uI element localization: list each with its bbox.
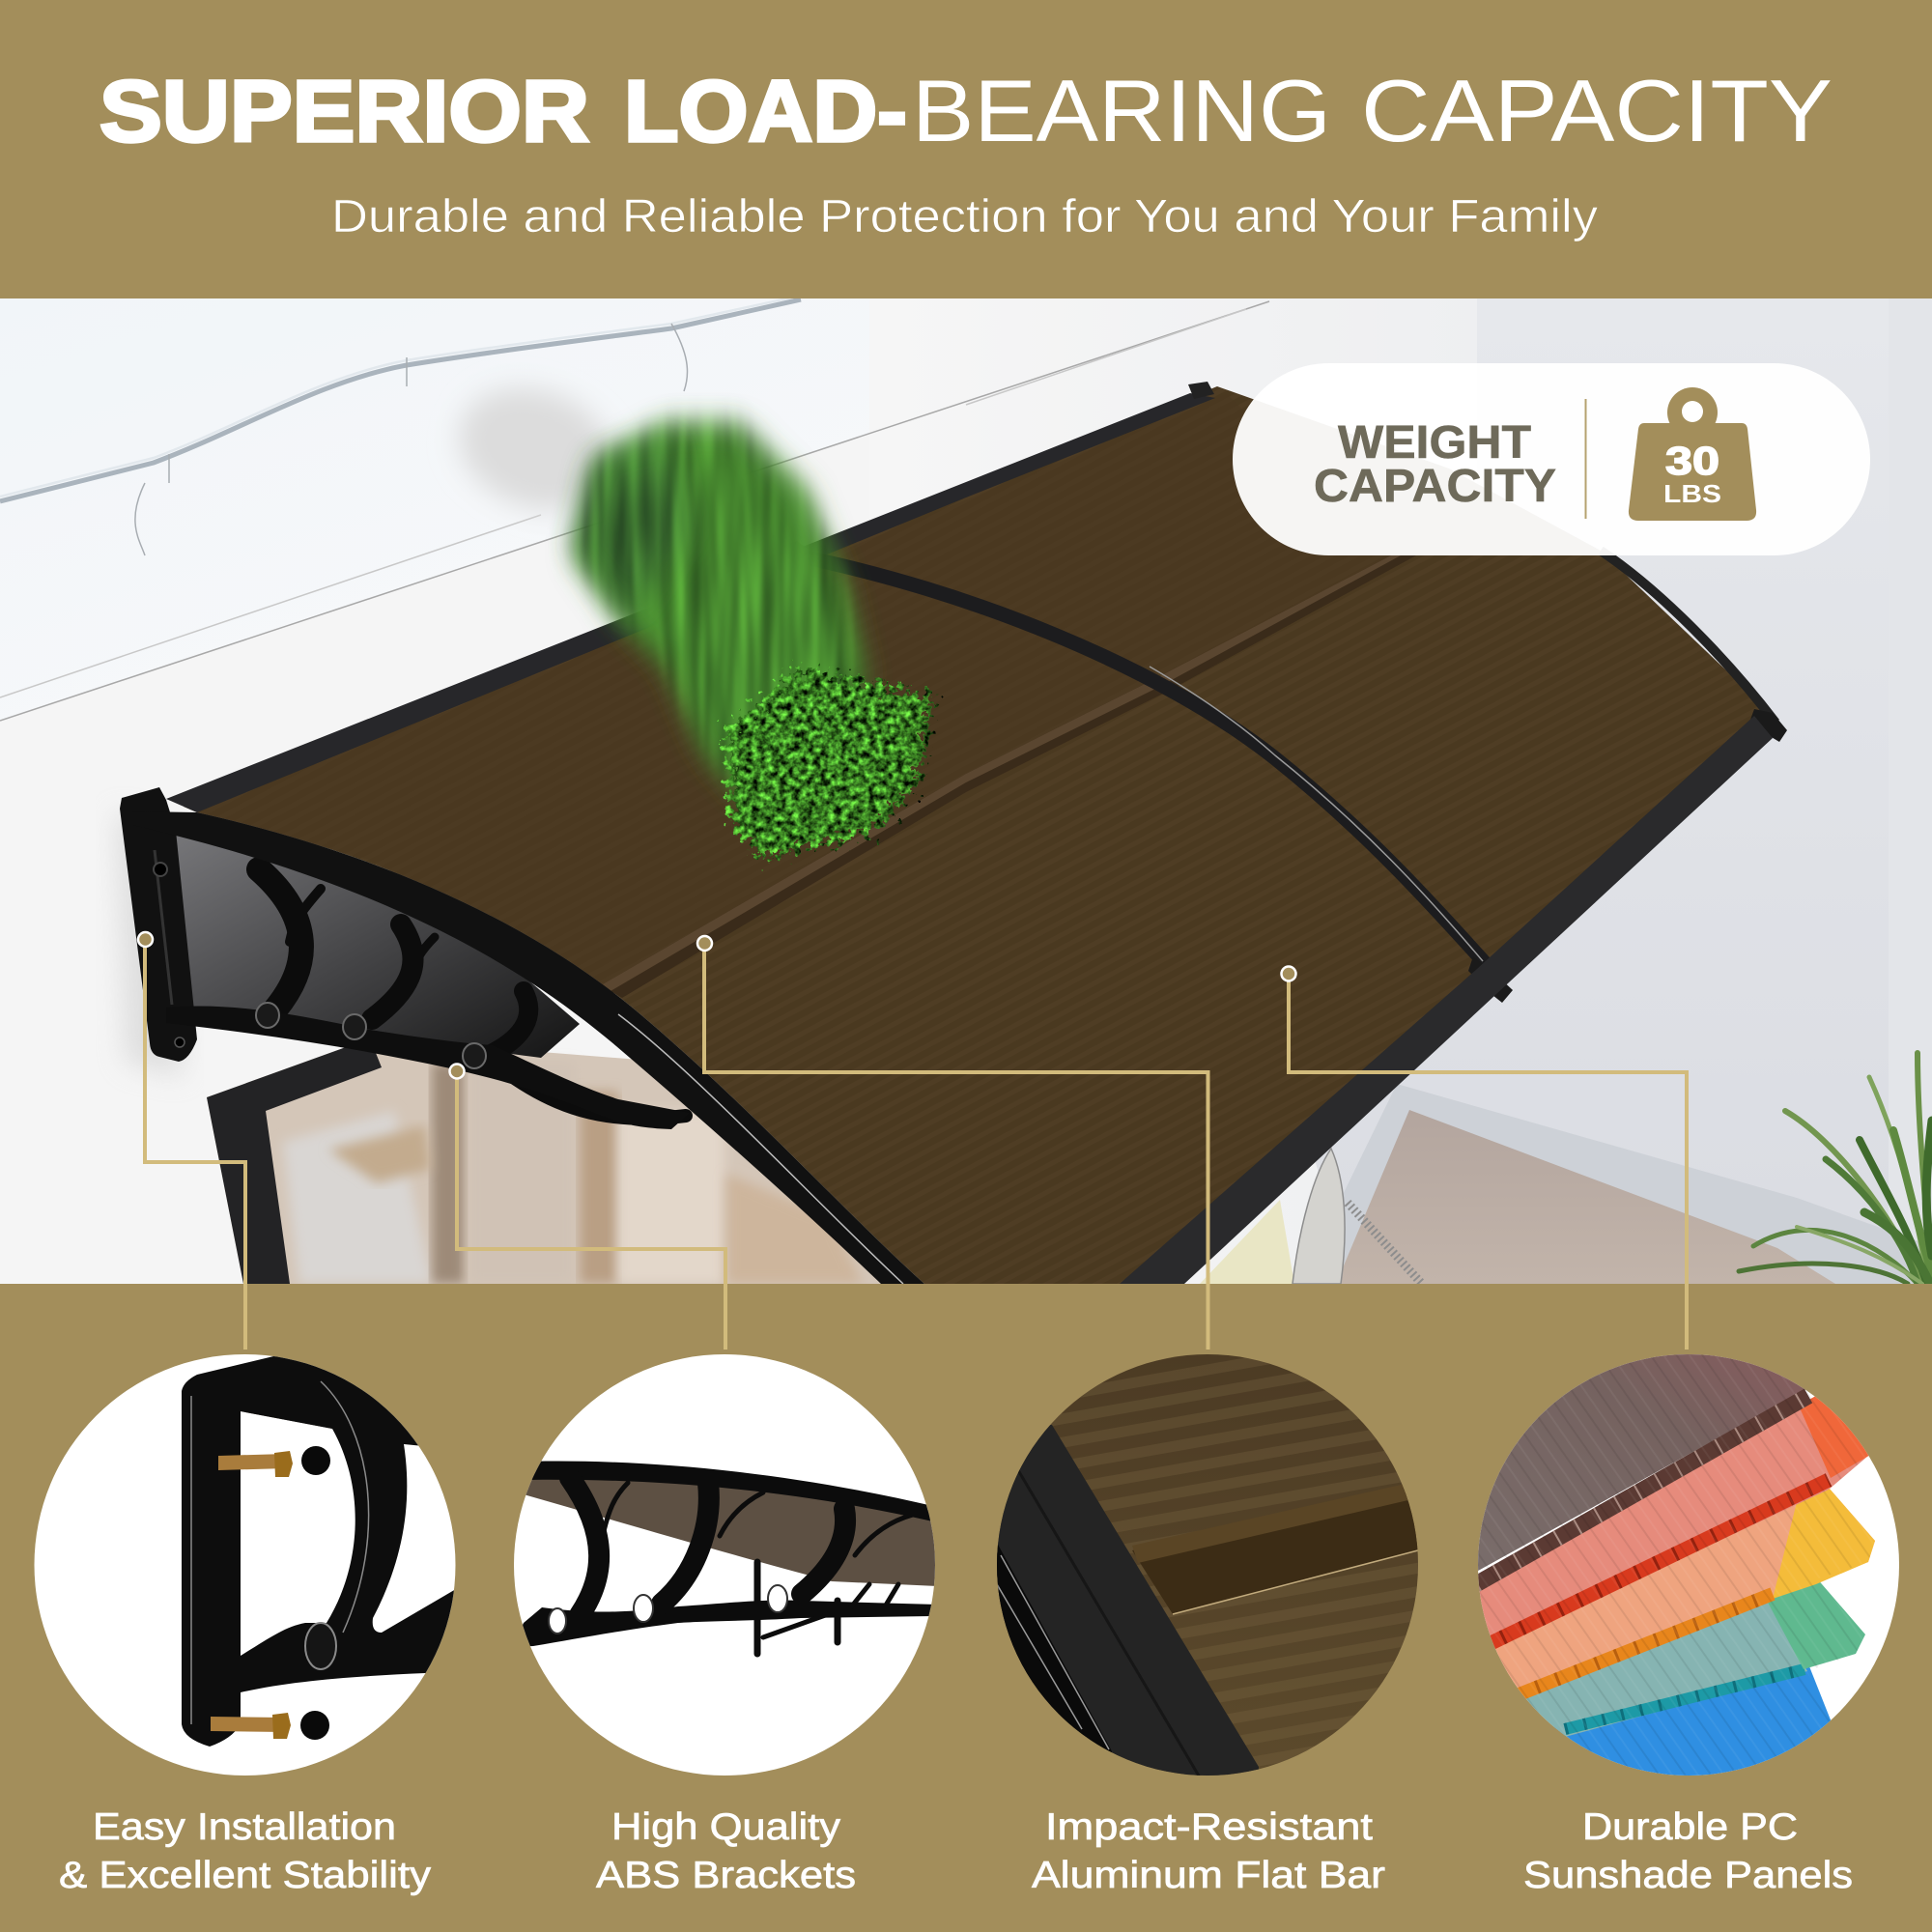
top arc band [517,1462,937,1522]
orange strip [1517,1594,1773,1695]
sharp plant foliage [726,667,933,858]
window under awning [207,1038,918,1284]
middle arc end cap [1468,956,1513,1003]
wall background [0,298,1932,1284]
title light part [912,63,1833,160]
icon: weight 30 lbs [1629,387,1756,521]
feature circle: ABS brackets [512,1352,937,1777]
teal panel [1497,1601,1807,1768]
rear end cap [1188,382,1214,399]
feature circle: PC sunshade panels [1449,1333,1903,1787]
panel: header band [0,0,1932,298]
caption: ABS brackets [596,1806,856,1896]
icon: weight 30 lbs: 30 [1665,439,1719,483]
yellow panel end [1773,1488,1875,1599]
title bold part: LOAD- [624,64,907,160]
bracket body [182,1352,456,1747]
connector stubs [245,1284,1687,1350]
bracket wall shadow [116,811,184,1077]
bracket lower arm [166,1007,690,1129]
blurred falling plant [575,425,865,802]
feature circle: aluminum flat bar [985,1352,1422,1787]
bottom bolt and nut [211,1711,329,1740]
title bold part [99,64,907,160]
brown strip [1476,1396,1808,1584]
plant bottom right [1739,1053,1932,1284]
bracket highlight lines [191,1381,369,1724]
feature circle: easy installation [29,1352,464,1777]
bracket scrolls [259,869,686,1119]
pill label: WEIGHT [1338,417,1531,469]
title light part: BEARING [912,63,1331,160]
caption: flat bar: Impact-Resistant [1045,1806,1373,1848]
black frame [985,1425,1259,1787]
subtitle: Durable and Reliable Protection for You and Your Family [331,191,1598,242]
callout dots [138,932,1296,1078]
caption: ABS brackets: ABS Brackets [596,1855,856,1896]
mid arc connector [778,541,810,560]
caption: ABS brackets: High Quality [611,1806,841,1848]
bracket holes [549,1585,787,1634]
net chair and cushion [1200,1149,1422,1284]
pill label [1314,417,1556,512]
peach panel [1478,1488,1875,1702]
right arc beam [1601,551,1776,723]
bracket hole [305,1623,336,1669]
caption: flat bar [1032,1806,1385,1896]
floor and baseboard [1299,1084,1932,1284]
bottom arm [512,1601,937,1647]
wall cable [0,296,801,555]
panel: bottom band [0,1284,1932,1932]
top bolt and nut [218,1446,330,1477]
translucent panel strip [241,1411,332,1429]
caption: PC panels: Sunshade Panels [1523,1855,1853,1896]
underside panel of bracket [176,831,580,1058]
caption: easy installation [59,1806,432,1896]
right end cap [1750,709,1787,742]
caption: easy installation: & Excellent Stability [59,1855,432,1896]
title light part: CAPACITY [1361,63,1833,160]
caption: PC panels [1523,1806,1853,1896]
back rail [166,393,1215,812]
panel: awning photo [0,296,1932,1284]
blue panel [1507,1662,1832,1787]
panel crossbar [601,555,1416,998]
callout: weight capacity pill [1233,363,1870,555]
panel rib texture [1473,1352,1903,1777]
awning panel [184,386,1768,1284]
scroll ribs [570,1478,913,1654]
bracket holes [256,1003,486,1068]
red strip [1483,1480,1829,1647]
flat bar [1132,1486,1422,1614]
caption: easy installation: Easy Installation [93,1806,396,1848]
middle arc beam [795,555,1488,966]
caption: flat bar: Aluminum Flat Bar [1032,1855,1385,1896]
green panel [1767,1577,1865,1669]
translucent panel underside [517,1473,937,1586]
title bold part: SUPERIOR [99,64,589,160]
pot shadow [452,382,612,518]
salmon panel [1473,1396,1868,1654]
wall bracket plate [120,787,197,1062]
icon: weight 30 lbs: LBS [1663,479,1721,508]
top gray panel [1449,1333,1835,1584]
pill label: CAPACITY [1314,461,1556,512]
callout lines [145,939,1687,1284]
caption: PC panels: Durable PC [1582,1806,1798,1848]
left arc beam [132,811,924,1284]
front rail [1120,716,1773,1284]
